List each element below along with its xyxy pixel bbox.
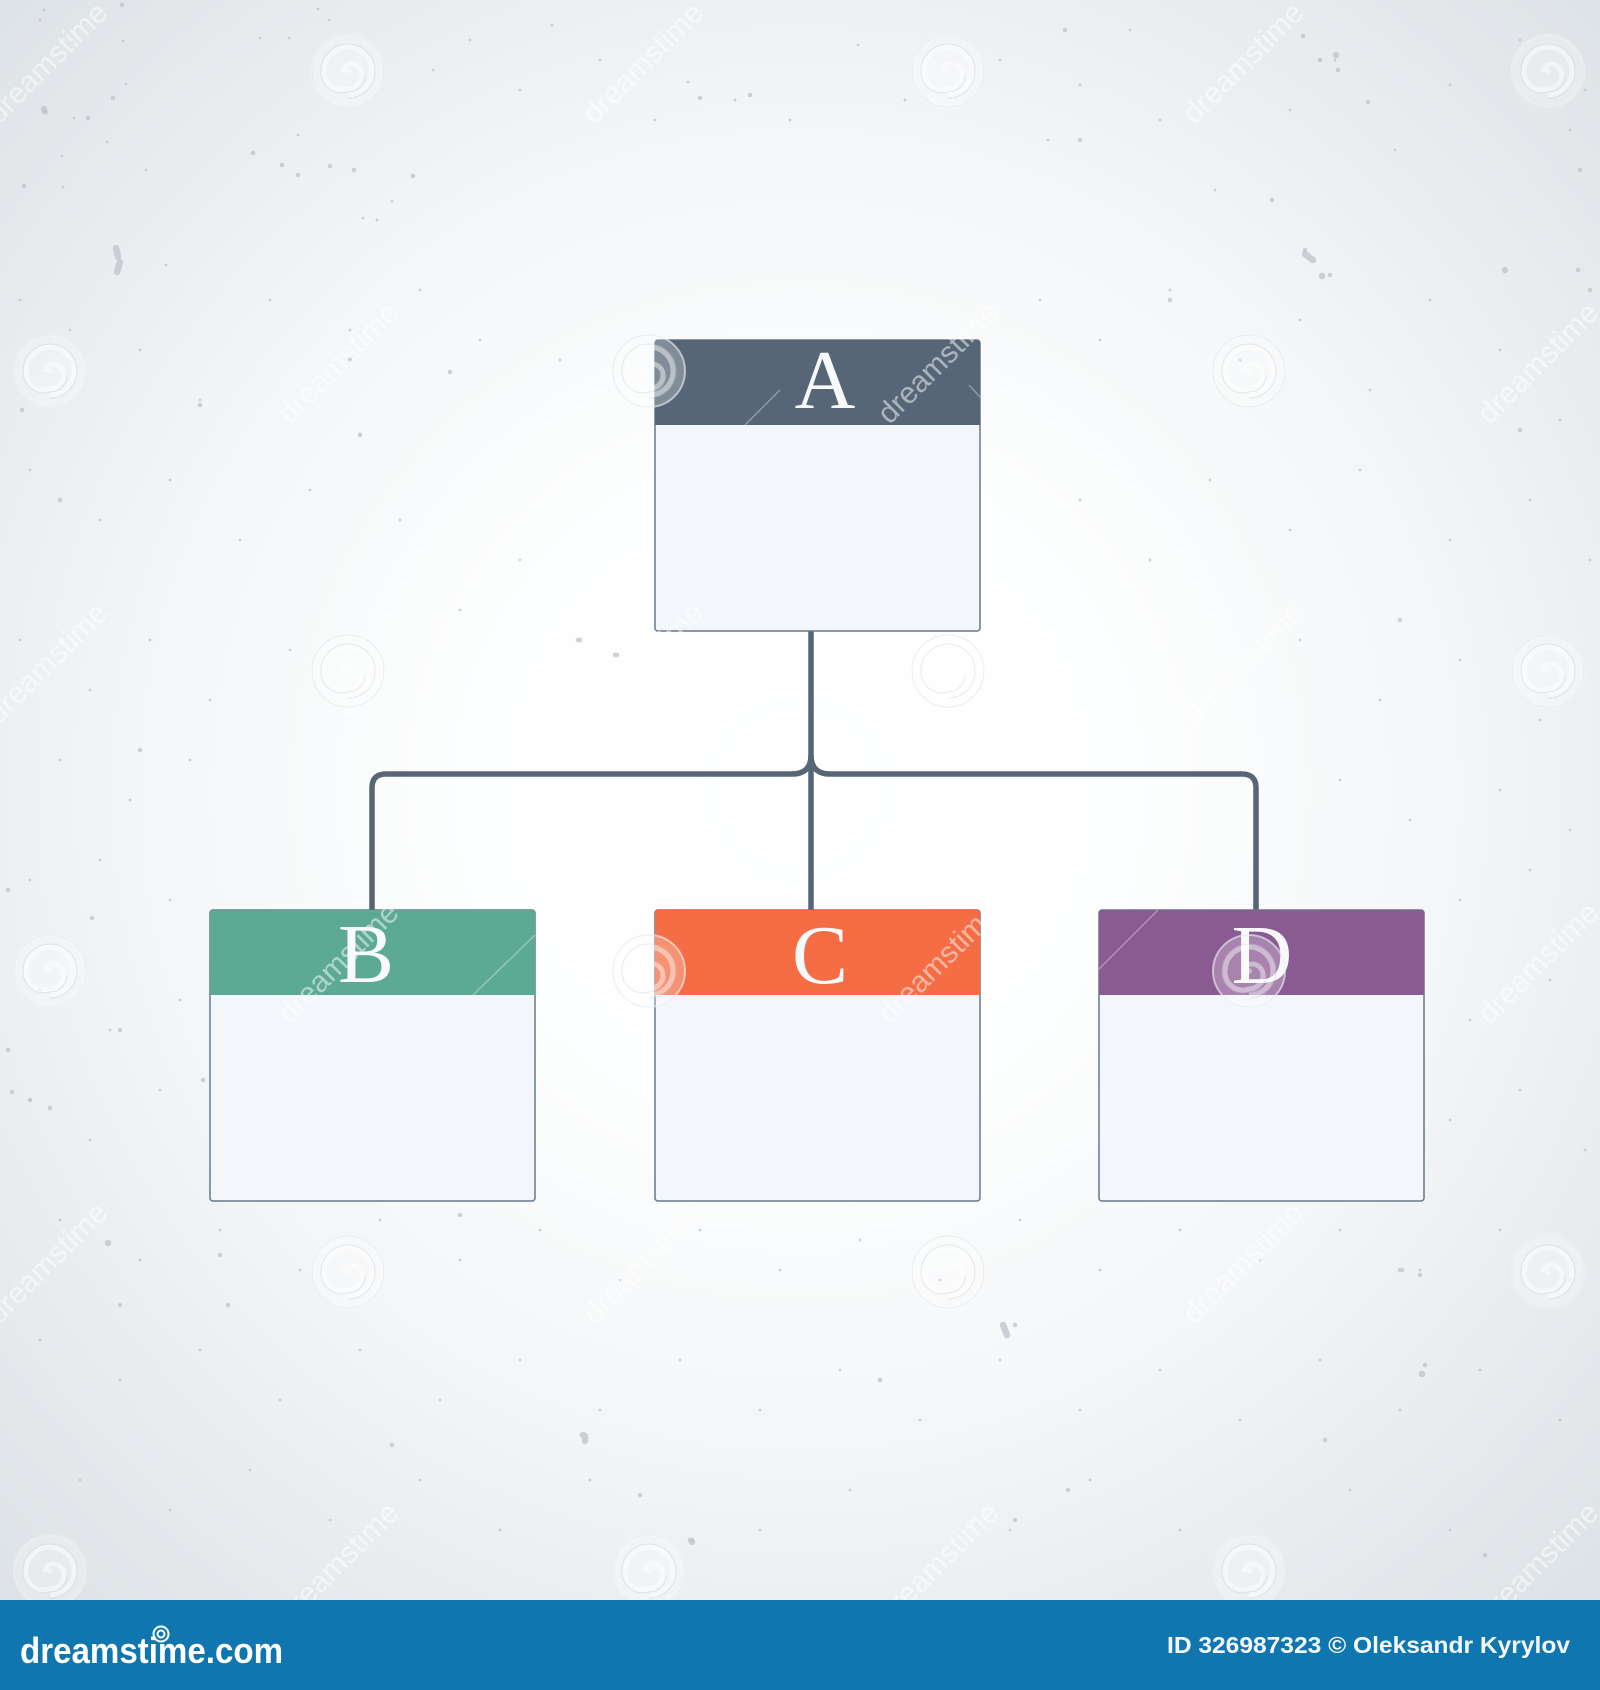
box B bbox=[210, 908, 535, 1201]
header B bbox=[210, 910, 535, 995]
letter B: B bbox=[338, 908, 394, 1001]
watermark overlay: dreamstime bbox=[871, 296, 1005, 430]
watermark overlay: dreamstime bbox=[871, 896, 1005, 1030]
box A bbox=[655, 334, 980, 631]
watermark overlay: dreamstime bbox=[576, 0, 710, 130]
letter A: A bbox=[795, 334, 856, 427]
header A bbox=[655, 340, 980, 425]
header C bbox=[655, 910, 980, 995]
watermark overlay: dreamstime bbox=[871, 1496, 1005, 1630]
image id and credit: ID 326987323 © Oleksandr Kyrylov bbox=[1167, 1632, 1570, 1658]
watermark overlay: dreamstime bbox=[271, 296, 405, 430]
watermark overlay: dreamstime bbox=[271, 1496, 405, 1630]
watermark overlay: dreamstime bbox=[1176, 596, 1310, 730]
box C bbox=[655, 909, 980, 1201]
header D bbox=[1099, 910, 1424, 995]
watermark overlay: dreamstime bbox=[271, 896, 405, 1030]
watermark overlay: dreamstime bbox=[1176, 1196, 1310, 1330]
watermark overlay: dreamstime bbox=[576, 596, 710, 730]
watermark overlay: dreamstime bbox=[1176, 0, 1310, 130]
box D bbox=[1099, 909, 1424, 1201]
letter D: D bbox=[1232, 909, 1292, 1002]
letter C: C bbox=[792, 909, 848, 1002]
watermark overlay: dreamstime bbox=[576, 1196, 710, 1330]
footer bar bbox=[0, 1600, 1600, 1690]
footer logo: dreamstime.com bbox=[20, 1630, 283, 1671]
connector lines bbox=[372, 628, 1256, 910]
icon: logo spiral bbox=[154, 1626, 168, 1642]
